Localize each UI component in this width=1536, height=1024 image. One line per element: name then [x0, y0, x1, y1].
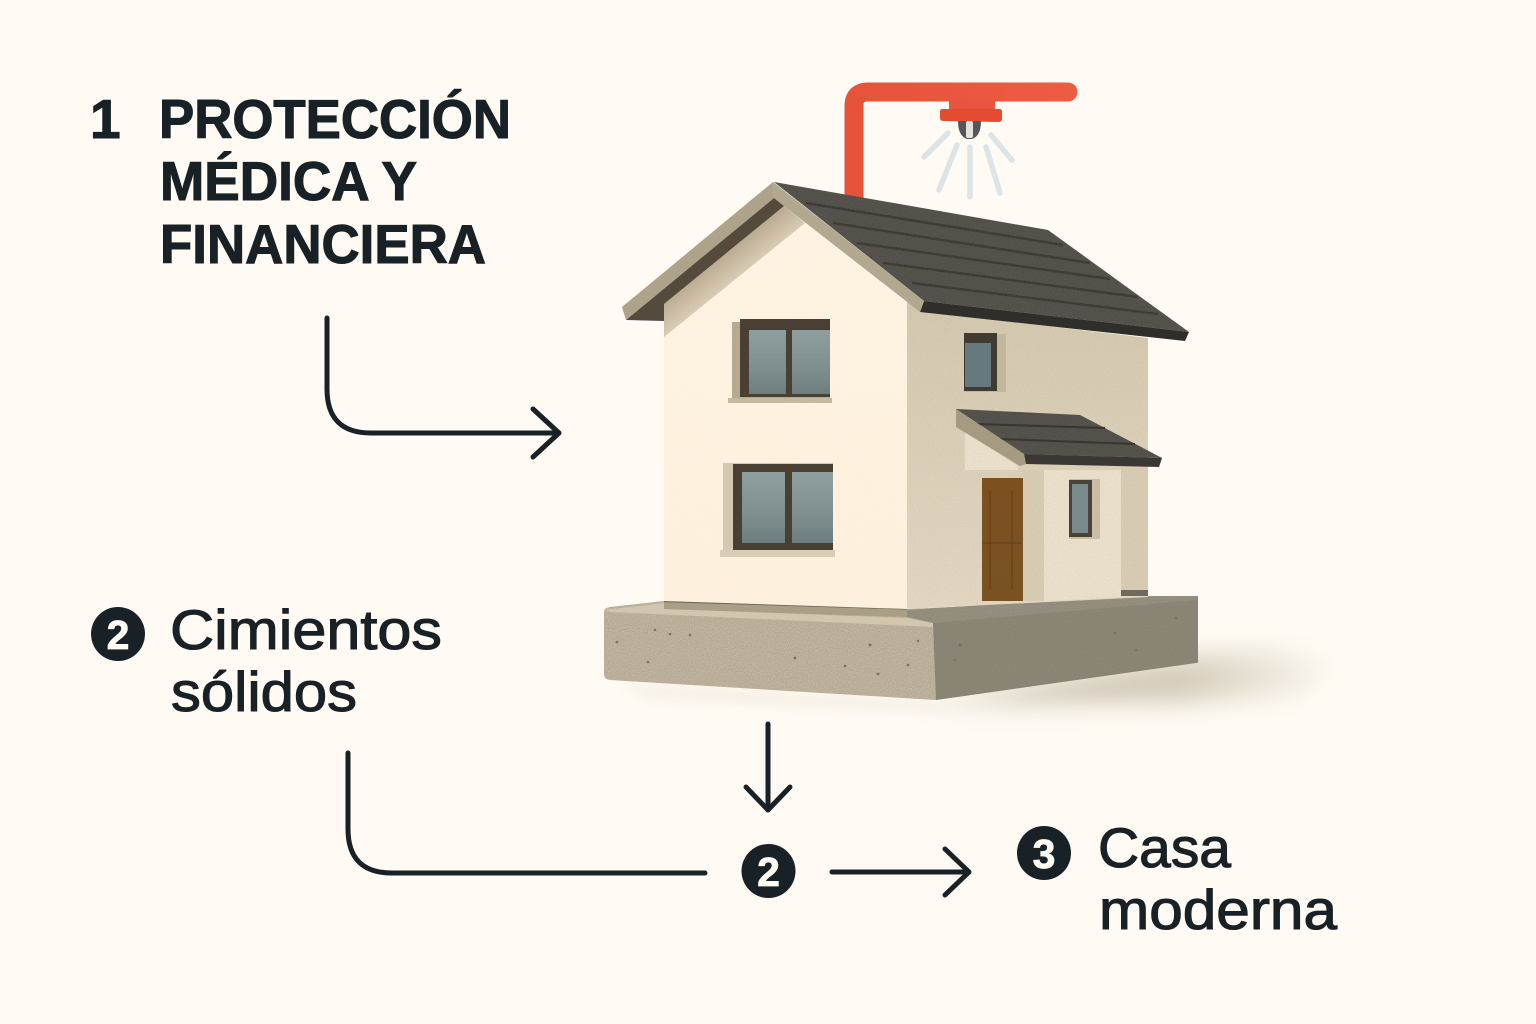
badge: middle 2	[742, 844, 796, 898]
gable shadow	[664, 206, 805, 337]
heading: step 1: 1	[90, 88, 121, 150]
roof: left barge board	[622, 182, 774, 320]
heading: step 1: FINANCIERA	[160, 213, 486, 275]
heading: step 1	[90, 88, 511, 275]
label: step 3 modern house	[1017, 816, 1338, 941]
wall: front gable	[664, 206, 907, 609]
small side window	[964, 333, 1006, 392]
icon: red sprinkler pipe	[854, 92, 1068, 198]
roof: eave edge	[920, 301, 1189, 341]
porch walls	[965, 432, 1148, 601]
concrete foundation	[604, 596, 1198, 700]
label: step 2 foundations	[91, 598, 442, 723]
door	[982, 478, 1023, 601]
label: step 2 foundations: Cimientos	[170, 598, 442, 661]
porch	[956, 409, 1162, 601]
lower left window	[720, 463, 835, 557]
arrow: from heading to house	[327, 318, 559, 457]
icon: water spray lines	[924, 133, 1012, 197]
heading: step 1: MÉDICA Y	[160, 150, 417, 212]
roof: right barge board	[773, 182, 924, 312]
badge 3	[1017, 826, 1071, 880]
label: step 3 modern house: moderna	[1099, 878, 1338, 941]
label: step 2 foundations: sólidos	[171, 660, 357, 723]
arrow: house down to middle badge	[746, 724, 790, 810]
porch window	[1069, 479, 1100, 539]
badge 3: 3	[1033, 831, 1055, 877]
arrow: middle badge to modern house	[832, 849, 969, 895]
ground shadow	[620, 650, 1345, 712]
badge 2	[91, 607, 145, 661]
label: step 3 modern house: Casa	[1098, 816, 1232, 879]
concrete specks	[616, 617, 1177, 675]
heading: step 1: PROTECCIÓN	[159, 88, 511, 150]
roof: soffit	[626, 198, 784, 321]
upper left window	[728, 319, 832, 403]
porch roof	[956, 409, 1162, 467]
house illustration	[91, 182, 1345, 941]
roof: dark shingled plane	[774, 182, 1189, 332]
arrow: from foundations to middle badge	[348, 753, 705, 873]
wall: right side	[907, 300, 1148, 609]
badge 2: 2	[107, 612, 129, 658]
badge: middle 2: 2	[757, 849, 780, 895]
